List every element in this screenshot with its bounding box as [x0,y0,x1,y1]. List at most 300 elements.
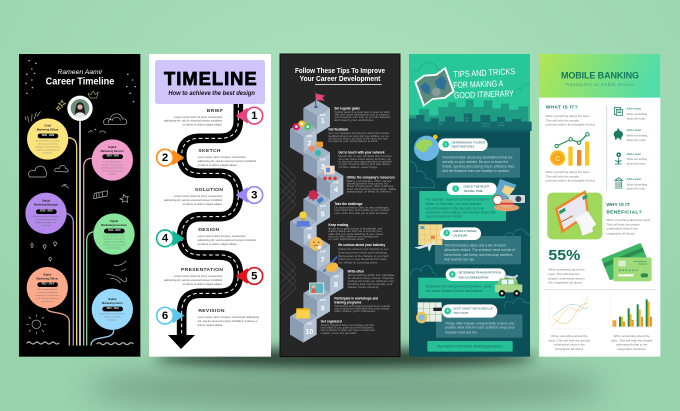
tip 5 [334,202,390,215]
milestone: blue: digital marketing [104,315,121,318]
row 5: provide extra time for each activity to keep your [445,326,516,330]
tip 7: Be curious about your industry [338,243,385,247]
tip 4: Many companies offer career [347,180,392,183]
step: solution: SOLUTION [195,187,223,193]
milestone: pink: Marketing Director [101,149,124,153]
caption left: understand what is the [554,343,585,347]
milestone: pink: and managed the entire [101,166,125,169]
section: what is it: This will help the people [546,118,579,122]
pin 6 [157,307,184,324]
tip 4: and mentoring programs. Take [347,188,397,191]
tip 8: Write often [348,270,364,274]
step: presentation: ut labore et dolore magna aliqua. [183,282,223,286]
tip 8: for almost every career. Regular [348,277,394,280]
icon: folder [296,308,310,318]
row 2: winter. In that case, you must prepare [426,202,481,206]
row 3: attractions visited. The schedule must consist of [444,248,515,252]
step: revision [198,308,259,327]
timeline lines [47,118,114,346]
step: sketch [198,148,256,167]
milestone: green [93,213,135,255]
milestone: pink: In my capacity as a [103,160,122,163]
milestone: green: brand awareness and [103,243,125,246]
tip 3: who can share useful advice and help you [338,158,392,161]
step: design: DESIGN [198,227,220,233]
title [46,69,115,87]
panel: mobile banking [539,54,660,357]
panel: road timeline [149,54,271,357]
caption right: understand what is the [616,343,648,347]
tip 6: Keep reading [328,223,348,227]
topic 4: Write something [627,182,648,186]
step: solution: Lorem ipsum dolor sit amet, consectetur [174,194,222,198]
row 3: travel times, site times, and free-map activities [444,253,513,257]
line chart [550,296,590,328]
icon: resources [323,166,337,180]
milestone: pink: marketing department [102,169,123,172]
row 2: For example, suppose you want to travel in [426,197,489,201]
header: MOBILE BANKING [561,71,639,81]
milestone: green: online presence. [106,246,122,249]
row 2 [419,183,506,221]
milestone: pink [92,139,133,181]
tip 8: Good writing skills are valuable [348,274,395,277]
milestone: purple: 2016 - 2018 [40,211,53,213]
tip 7: know about new trends and technology. [338,251,388,254]
pin 4 [157,230,184,247]
row 5: TOO TIGHT [453,311,469,315]
tip 10: make room for growth. [321,332,358,335]
section: why beneficial: WHY IS IT [606,202,630,208]
title: Follow These Tips To Improve [295,68,385,75]
row 4: 4 [451,272,453,276]
section: why beneficial: infographic all about. [606,231,635,235]
icon: jeep [495,274,522,297]
row 3: This list includes dates and a list of tourist [444,244,506,248]
step: design: ut labore et dolore magna aliqua. [198,242,238,246]
tip 6: and your field, whatever your background [328,235,379,238]
heading box [155,60,265,104]
pin 1 [236,107,263,124]
panel shadows [85,349,605,411]
step cubes: 8 [334,282,338,289]
row 5: Things often happen unexpectedly. Ensure you [445,321,514,325]
step cubes [290,100,343,343]
milestone: purple: team, campaigns and [36,218,57,221]
milestone: orange: Marketing Officer [36,276,58,280]
row 1: DESTINATIONS [452,145,474,149]
skyline [409,100,532,132]
header [539,54,660,98]
title [295,68,385,85]
step: presentation: PRESENTATION [181,267,223,273]
step cubes: STEP [306,228,313,230]
tip 5: Take the challenge [334,202,363,206]
step: revision: Lorem ipsum dolor sit amet, consectetur adipiscing [198,315,259,319]
text: chart caption [546,170,596,183]
caption left: Write something about the [551,334,588,338]
tip 4: their employees, like training [347,185,394,188]
lattice pattern [280,162,296,304]
cloud outlines [411,63,530,95]
milestone: blue [92,289,133,330]
tip 10: keep track of your goals and meet deadlines. [321,326,374,329]
tip 6: reading widely can help you to improve your [328,230,382,233]
tip 1: your progress over time so you can advance [334,116,391,119]
milestone: yellow: 2020 - 2022 [42,135,55,137]
milestone: blue: Assist with marketing and [100,312,126,315]
row 5 [416,302,522,338]
step cubes: STEP [333,183,339,185]
milestone: pink: director, I took charge [102,163,124,166]
step: presentation: Lorem ipsum dolor sit amet, consectetur [174,274,222,278]
caption right [611,334,653,351]
tip 9: training programs [334,300,362,304]
step cubes: 7 [321,257,325,264]
row 2: medicines, thick clothes, and various foods that [426,211,495,215]
topic 2: Add a topic [627,128,642,132]
milestone: blue: Marketing Intern [102,301,123,305]
row 2: TRAVEL TIME [463,189,483,193]
milestone: pink: 2018 - 2020 [106,156,120,158]
tip 10: Get organized [321,319,342,323]
tip 10 [321,319,375,335]
milestone: green: Digital [110,219,118,223]
tip 5: Do not be afraid to take on new challenges, [334,206,390,209]
tip 1: with your career development and to measure [334,113,390,116]
chart: coin and bars: C [555,154,561,163]
milestone: orange: Digital [43,272,52,276]
caption right: topic. This will help the people [611,338,653,342]
row 1: and the distance from one location to another. [442,169,510,173]
row 4 [418,268,506,298]
milestone: pink: Digital [108,145,117,149]
section: why beneficial [606,202,651,235]
step cubes: STEP [320,300,326,302]
section: what is it: understand what is the infographic all about. [546,123,596,127]
pin 6: 6 [162,310,168,322]
milestone: yellow [27,118,68,160]
milestone: green: taking on a key role in [103,237,125,240]
tip 4: development resources for [347,182,389,185]
step: presentation: adipiscing elit, sed do eiusmod tempor incididunt [164,278,223,282]
step: presentation [164,267,223,286]
tip 4: Utilize the company's resources [347,175,395,179]
topic 3 [615,152,648,165]
milestone: yellow: Chief [44,123,51,127]
tip 3: in your chosen industry and stay aware [338,163,391,166]
row 4: DETERMINE TRANSPORTATION [458,271,501,275]
pin 4: 4 [162,233,169,245]
topic 3: Write something [627,157,648,161]
milestone: yellow: planning, marketing [38,143,58,146]
tip 2: Get feedback [328,128,348,132]
row 2: accommodation in the itinerary, such as [426,206,484,210]
step: brief: Lorem ipsum dolor sit amet, consectetur [174,115,222,119]
icon: credit cards [601,243,652,281]
step cubes: STEP [320,159,326,161]
step cubes: 5 [321,211,325,218]
tip 3: Reach out to your contacts and mentors [338,155,393,158]
topic 2 [614,128,648,142]
milestone: orange [27,267,68,308]
step cubes: 3 [321,164,325,171]
tip 3: to discover new opportunities for growth [338,160,392,163]
icon: challenge [307,189,324,204]
milestone: green: Marketing Executive [101,223,127,227]
tip 2: to improve your performance at work. [328,140,379,143]
topic 1: Add a topic [627,106,642,110]
tip 4: advantage of what is offered. [347,190,392,193]
pin 5: 5 [251,270,257,282]
title: FOR MAKING A [453,78,504,90]
caption right: Write something about the [613,334,650,338]
stat: 55%: the infographic all about. [548,281,583,285]
milestone: yellow: Marketing Officer [37,127,59,131]
portrait [67,96,93,121]
tip 10: Staying organized helps you manage your time, [321,324,375,327]
milestone: orange: campaigns, social media [35,295,60,297]
row 3: 3 [446,231,448,235]
tip 2 [328,128,390,143]
milestone: yellow: As chief officer, I lead all [36,140,60,143]
tip 6: skills and your understanding of your career [328,233,384,236]
tip 1: Set regular goals [334,107,360,111]
milestone: green: strategies for building [104,240,125,243]
title: Career Timeline [46,76,115,87]
section: why beneficial: This will help the people [606,222,640,226]
title: TIPS AND TRICKS [453,66,516,79]
milestone: purple: Digital [42,198,50,202]
tip 3: Get in touch with your network [338,151,385,155]
step: brief: ut labore et dolore magna aliqua. [183,122,223,126]
pin 2: 2 [162,152,168,164]
icon: writing hand [324,257,338,272]
caption left: topic. This will help the people [549,338,590,342]
panel: travel itinerary [409,54,532,357]
tip 7: Being aware of the changes in your field [338,255,389,258]
row 4: Determine the transport need to leave, return, [426,285,493,289]
tip 8: thinking and communicate your [348,283,393,286]
topic 1: about the topic. [627,116,646,120]
section: what is it: WHAT IS IT? [546,104,578,110]
row 2: 2 [455,187,457,191]
step cubes: 6 [307,234,311,241]
row 2: support tourism in winter. [426,215,463,219]
pin 3: 3 [251,189,257,201]
topic 4: about the topic. [627,187,646,191]
tip 9: who share your interests. [334,310,376,313]
milestone: pink: strategy. [108,172,117,175]
stat: 55%: people understand what is [548,276,585,280]
illustration: payment monitor [547,190,602,239]
text: chart caption: This will help the people [546,174,579,178]
tip 6 [328,223,384,241]
section: what is it: Write something about the topic. [546,114,591,118]
step: sketch: SKETCH [198,148,221,154]
pin 5 [236,268,263,284]
icon: workshop [310,283,324,294]
row 1: already on your wishlist. Be sure to know the [442,160,508,164]
tip 1 [334,107,391,122]
milestone: purple: Responsible for leading the [33,215,60,218]
icon: reading [296,211,310,227]
milestone: orange: Was responsible for [38,288,57,291]
icon: feedback bubbles [293,120,311,130]
milestone: orange: performance. [41,300,54,303]
step: revision: REVISION [198,308,225,314]
panel: career timeline [19,54,140,357]
milestone: orange: executing marketing [38,291,58,294]
milestone: orange: and tracking marketing [36,297,59,300]
milestone: blue: Digital [108,297,117,301]
step: solution [164,187,223,206]
icon: flag [314,92,325,108]
stat: 55%: Write something about the [548,267,585,271]
tip 6: or your experience level. [328,238,365,241]
section: what is it [546,104,596,127]
footer credit [427,341,513,352]
stat: 55% [548,247,585,285]
icon: map [413,67,456,107]
caption left: infographic all about. [555,347,584,351]
tip 7: for what is coming next. [338,261,379,264]
stat: 55%: 55% [548,247,580,264]
title [453,66,516,100]
step cubes: STEP [333,277,339,279]
step cubes: STEP [306,323,313,325]
milestone: orange: 2012 - 2014 [41,283,55,286]
tip 5: even when they feel outside of your comfort [334,209,390,212]
row 1 [414,135,520,178]
step: revision: dolore magna aliqua. [198,323,223,327]
milestone: purple: digital strategy for the [36,221,57,224]
tip 4 [347,175,397,193]
tip 8: writing can help you sharpen your [348,280,395,283]
step cubes: STEP [320,252,326,254]
row 5: 5 [447,309,449,313]
chart: coin and bars [550,133,589,166]
text: chart caption: understand what is the infographic all about. [546,179,596,183]
tip 5: zone, since they help you to learn and grow. [334,212,388,215]
topic 4: Add a topic [627,177,642,181]
milestone: yellow: marketing campaigns for [36,149,60,152]
tip 7 [338,243,389,264]
step cubes: STEP [306,136,313,138]
heading box: How to achieve the best design [168,90,255,97]
bar chart [610,296,653,328]
milestone: purple: company. [41,225,51,227]
doodles [25,61,135,345]
title: Your Career Development [300,76,381,83]
tip 3: of the latest openings. [338,166,379,169]
icon: curious face [310,237,323,250]
milestone: green: As an executive, I was [103,234,126,237]
tip 9 [334,296,390,313]
footer credit: By Adeline Pietrantoni @wellbygreatness [437,344,503,348]
step cubes: 4 [334,187,338,194]
road [168,104,238,349]
panel: career tips [280,54,400,357]
topic 4 [615,177,648,191]
milestone: purple [25,193,67,234]
step: sketch: ut labore et dolore magna aliqua. [198,163,238,167]
tip 2: Ask your managers and peers to share their honest [328,132,389,135]
row 2: CHECK THE RIGHT [463,185,490,189]
stat: 55%: topic. This will help the [548,272,580,276]
row 1: 1 [445,142,447,146]
heading box: TIMELINE [164,68,257,89]
caption right: infographic all about. [617,347,646,351]
step cubes: 2 [307,140,311,147]
tip 1: and reach your ambitions. [334,119,375,122]
pin 2 [157,149,184,166]
row 3: that tourists can use. [444,257,475,261]
icon: network [309,142,323,156]
tip 9: way to build new skills and meet other people [334,307,390,310]
topic 1 [614,106,648,120]
section: why beneficial: Write something about the topic. [606,218,651,222]
row 3 [414,224,521,264]
tip 8 [348,270,395,289]
step: solution: adipiscing elit, sed do eiusmod tempor incididunt [164,198,223,202]
pin 3 [236,187,263,203]
row 4: AND ACCOMMODATION [458,276,488,280]
step: brief [164,108,223,126]
row 1: Find information about any destinations that are [442,156,513,160]
tip 3 [338,151,393,169]
row 5: DON'T MAKE THE SCHEDULE [453,307,493,311]
icon: travel items [493,179,525,211]
tip 1: Setting goals is a good way to keep on track [334,111,391,114]
topic 3: about the topic. [627,161,646,165]
milestone: purple: Marketing Manager [34,202,58,206]
caption left [549,334,590,351]
milestone: blue: 2010 - 2012 [106,308,120,310]
row 3: CREATE A TRAVEL [453,229,477,233]
section: why beneficial: BENEFICIAL? [606,209,642,215]
step: design [198,227,256,246]
topic 3: Add a topic [627,152,642,156]
milestone: yellow: the brand. [43,151,53,154]
title: Rameen Aamir [57,69,103,76]
cloud outlines dark [410,162,530,308]
step: design: adipiscing elit, sed do eiusmod tempor incididunt [198,238,256,242]
pin 1: 1 [251,110,257,122]
step: revision: elit, sed do eiusmod tempor incididunt ut labore et [198,319,258,323]
step: solution: ut labore et dolore magna aliqua. [183,202,223,206]
tip 2: feedback about your work and your abilities, so you [328,135,390,138]
milestone: yellow: strategies and overseeing [35,146,61,149]
row 3: CALENDAR [453,233,467,237]
tip 9: Participate in workshops and [334,296,378,300]
tip 7: helps you to stay ahead and be ready [338,258,388,261]
topic 1: Write something [627,112,648,116]
step: brief: adipiscing elit, sed do eiusmod tempor incididunt [164,118,223,122]
tip 2: can find out what to do better in the future and how [328,137,388,140]
tip 6: Books are a great source of knowledge, and [328,227,383,230]
step: sketch: Lorem ipsum dolor sit amet, consectetur [198,155,246,159]
milestone: blue: strategies. [107,318,118,321]
tip 8: ideas more clearly. [348,286,380,289]
row 1: DETERMINING TOURIST [452,140,486,144]
topic 2: about the topic. [627,138,646,142]
topic 2: Write something [627,134,648,138]
text: chart caption: Write something about the topic. [546,170,591,174]
section: why beneficial: understand what is the [606,227,638,231]
title: GOOD ITINERARY [454,88,514,100]
tip 7: Follow the news in your industry so you [338,248,389,251]
